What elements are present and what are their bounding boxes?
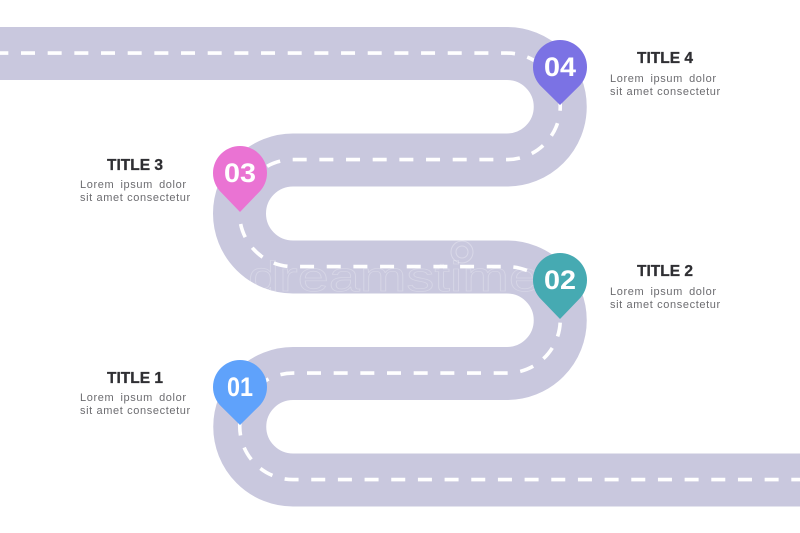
pin 02: [533, 253, 587, 319]
pin 01: 01: [227, 372, 253, 402]
pin 03: [213, 146, 267, 212]
label: title 2: sit amet consectetur: [610, 299, 721, 311]
label: title 2: TITLE 2: [637, 263, 693, 280]
label: title 1: sit amet consectetur: [80, 405, 191, 417]
watermark: [248, 241, 540, 300]
label: title 1: Lorem ipsum dolor: [80, 392, 187, 404]
label: title 3: [80, 157, 191, 204]
label: title 1: [80, 370, 191, 417]
pin 02: 02: [544, 265, 576, 295]
label: title 4: TITLE 4: [637, 50, 693, 67]
label: title 1: TITLE 1: [107, 370, 163, 387]
label: title 4: Lorem ipsum dolor: [610, 73, 717, 85]
label: title 3: TITLE 3: [107, 157, 163, 174]
watermark: dreamstime: [248, 253, 540, 300]
label: title 3: sit amet consectetur: [80, 192, 191, 204]
label: title 4: sit amet consectetur: [610, 86, 721, 98]
label: title 2: Lorem ipsum dolor: [610, 286, 717, 298]
pin 01: [213, 360, 267, 425]
label: title 2: [610, 263, 721, 311]
pin 03: 03: [224, 158, 256, 188]
pin 04: [533, 40, 587, 105]
pin 04: 04: [544, 52, 576, 82]
label: title 4: [610, 50, 721, 98]
label: title 3: Lorem ipsum dolor: [80, 179, 187, 191]
